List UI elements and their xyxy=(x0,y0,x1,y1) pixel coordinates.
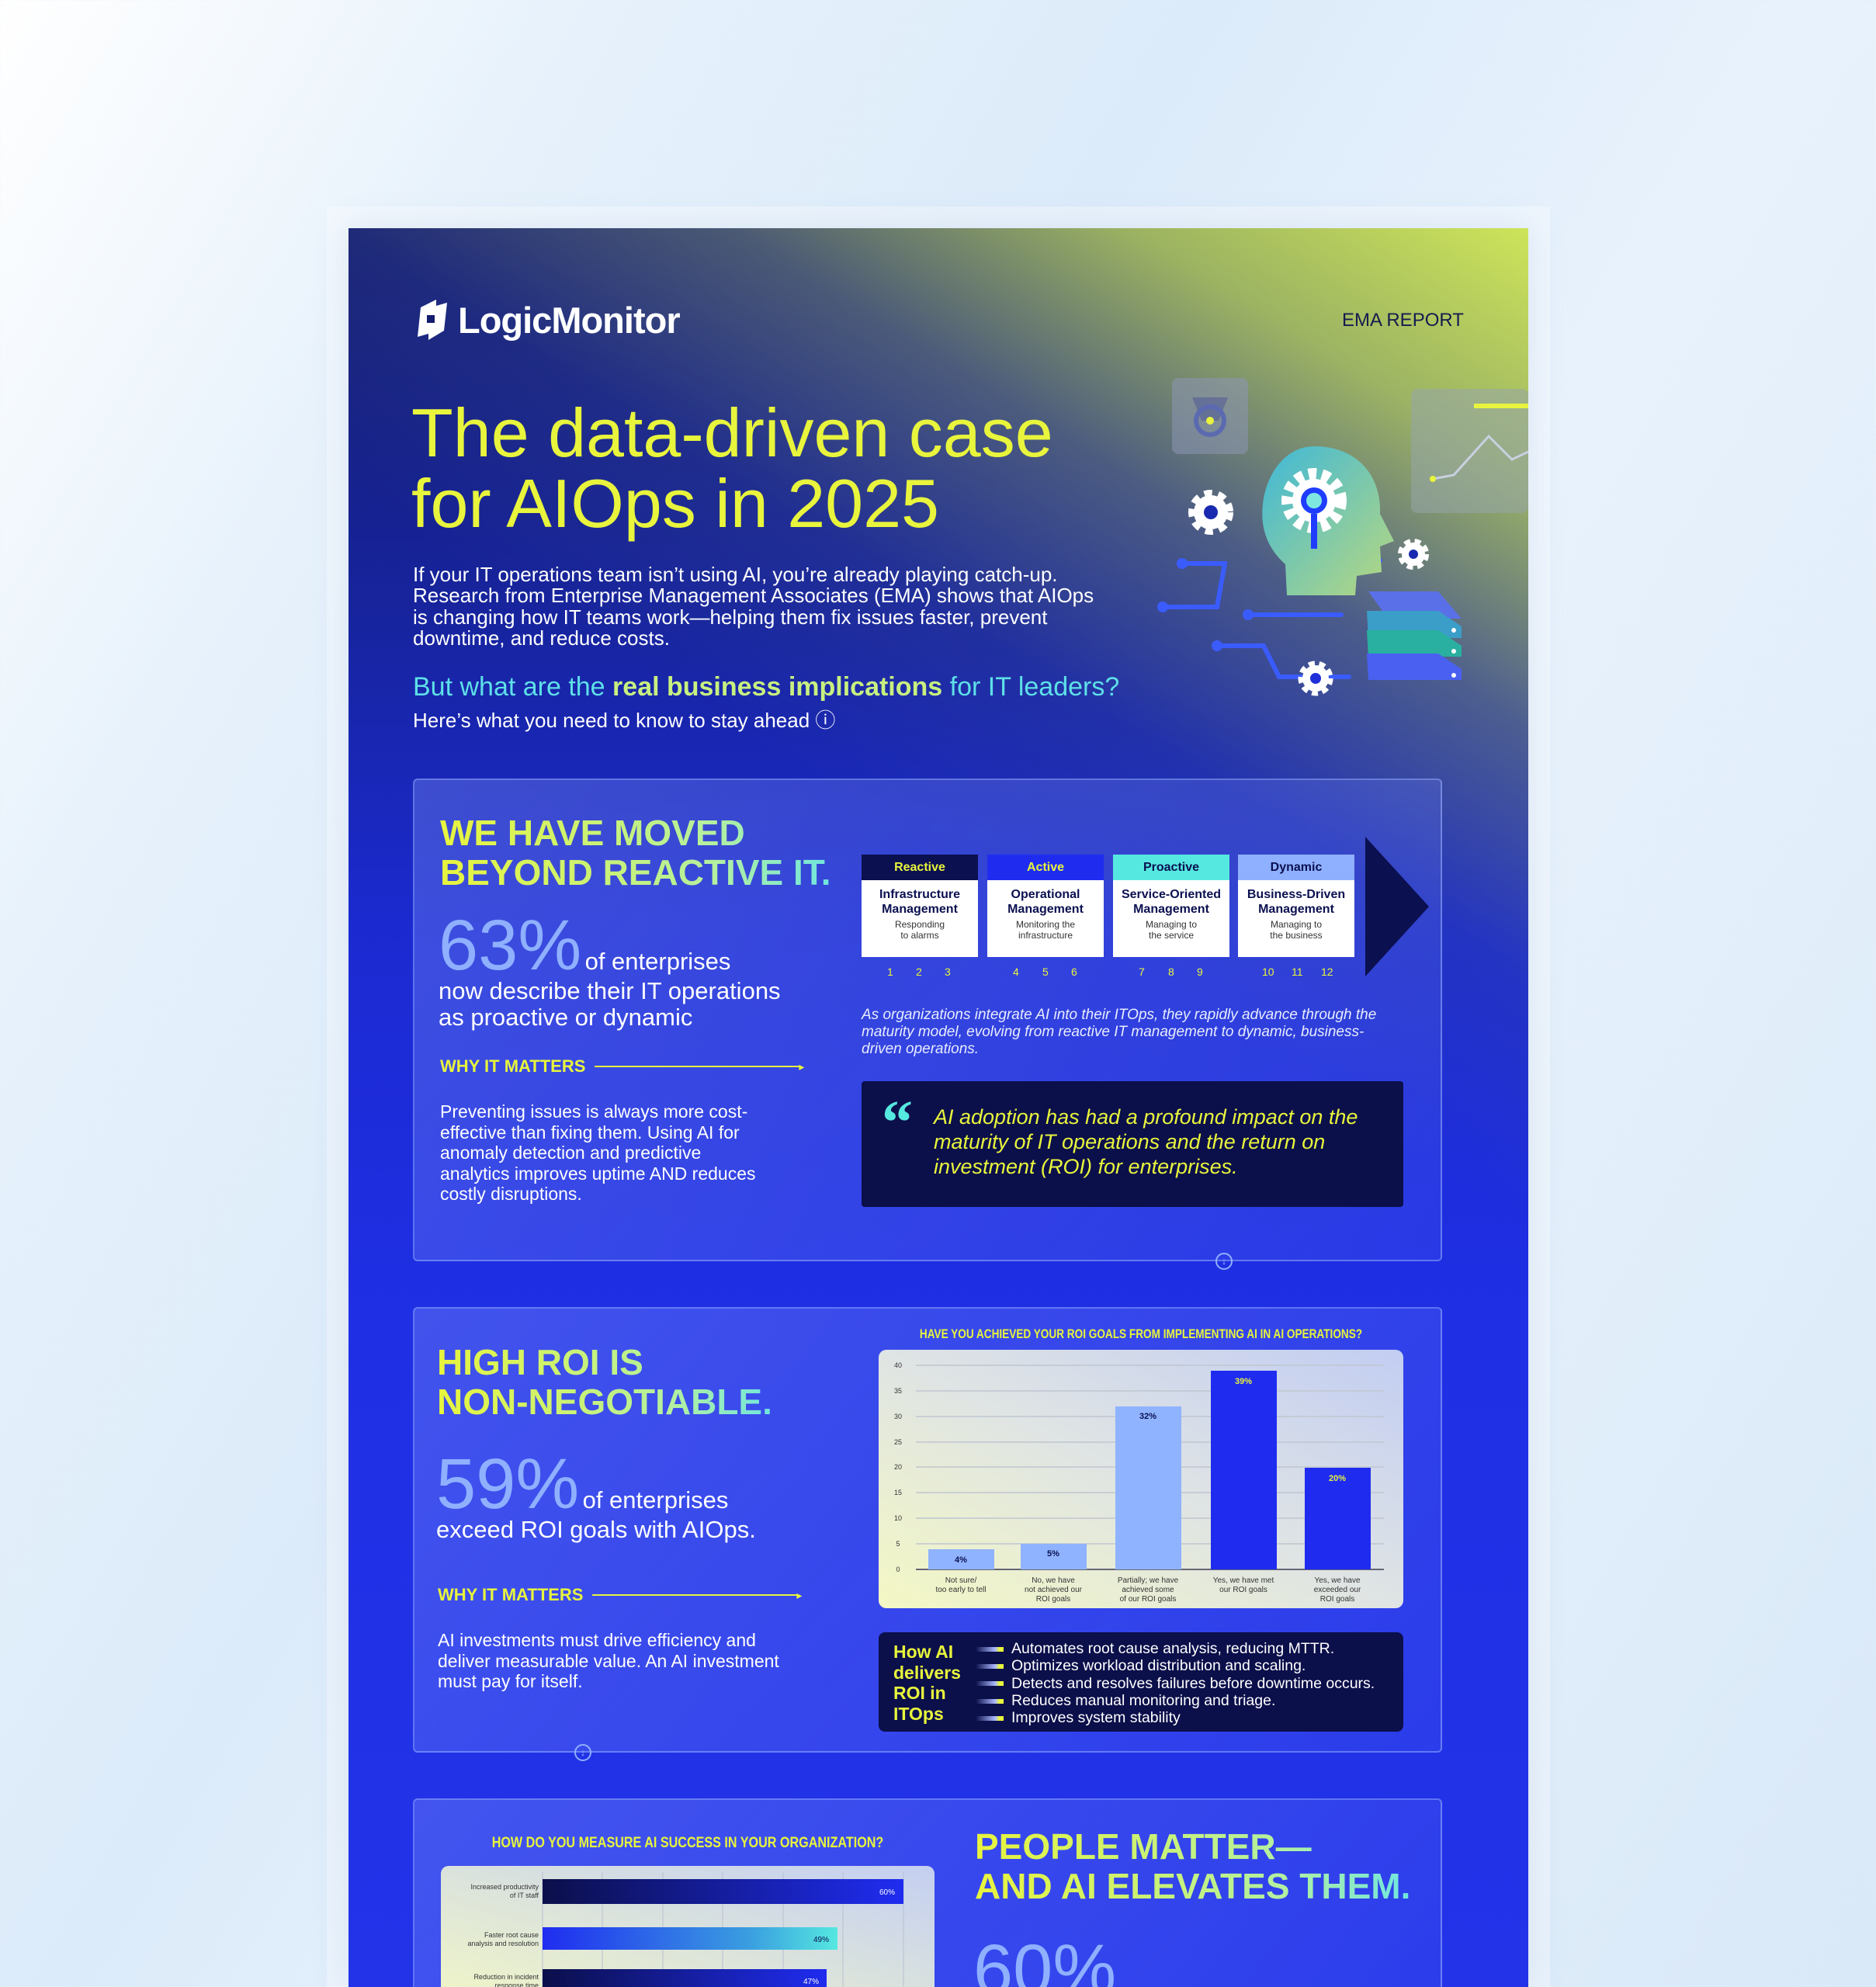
label: why it matters: ▸ xyxy=(796,1588,802,1600)
callout: how AI delivers ROI xyxy=(879,1632,1403,1732)
box: active xyxy=(987,855,1104,957)
heading: we have moved beyond reactive IT xyxy=(440,813,831,893)
maturity levels 1-12: 3 xyxy=(945,966,951,978)
callout: how AI delivers ROI: Improves system stability xyxy=(1011,1709,1181,1726)
box: active: Management xyxy=(1007,903,1084,916)
bar chart: ROI goals: 35 xyxy=(894,1387,902,1395)
intro text: If your IT operations team isn’t using AI, you’re already playing catch-up. Research from Enterprise Management Associates (EMA) shows that AIOps is changing how IT teams work—helping them fix issues faster, prevent downtime, and reduce costs. xyxy=(413,563,1094,650)
heading: high ROI is non-negotiable xyxy=(437,1343,772,1422)
bar chart: AI success measures: Reduction in incident xyxy=(473,1973,539,1981)
bar chart: AI success measures: Increased productivity xyxy=(470,1883,539,1891)
icon: scroll down xyxy=(574,1744,591,1761)
panel: beyond reactive IT xyxy=(413,779,1442,1261)
logo: LogicMonitor xyxy=(458,300,680,340)
box: proactive: Service-Oriented xyxy=(1122,888,1221,901)
callout: how AI delivers ROI: Optimizes workload distribution and scaling. xyxy=(1011,1657,1306,1674)
bar chart: AI success measures: 49% xyxy=(813,1936,829,1944)
maturity levels 1-12: 5 xyxy=(1042,966,1049,978)
panel: high ROI xyxy=(413,1307,1442,1753)
maturity levels 1-12: 12 xyxy=(1321,966,1333,978)
card: infographic page xyxy=(348,228,1528,1987)
bar chart: ROI goals: ROI goals xyxy=(1320,1595,1354,1604)
box: reactive: Infrastructure xyxy=(879,888,960,901)
callout: how AI delivers ROI: How AI xyxy=(893,1642,953,1662)
stat: 59%: 59% of enterprises xyxy=(436,1444,728,1524)
bar chart: ROI goals: 40 xyxy=(894,1361,902,1369)
panel: people matter xyxy=(413,1798,1442,1987)
box: dynamic: Business-Driven xyxy=(1247,888,1345,901)
bar chart: AI success measures xyxy=(441,1866,935,1987)
box: proactive: the service xyxy=(1149,930,1194,941)
bar chart: ROI goals: 20 xyxy=(894,1463,902,1471)
heading: people matter: AND AI ELEVATES THEM. xyxy=(975,1866,1410,1906)
maturity levels 1-12: 6 xyxy=(1071,966,1077,978)
box: reactive: Management xyxy=(882,903,958,916)
box: active: Monitoring the xyxy=(1016,919,1075,930)
bar chart: AI success measures: 47% xyxy=(803,1978,819,1986)
maturity model diagram xyxy=(1365,837,1429,976)
box: proactive xyxy=(1113,855,1229,957)
bar chart: ROI goals: 5% xyxy=(1047,1549,1059,1559)
callout: how AI delivers ROI: ROI in xyxy=(893,1683,946,1703)
bar chart: ROI goals: too early to tell xyxy=(935,1586,987,1594)
box: active: Active xyxy=(1027,861,1064,874)
callout: quote xyxy=(862,1081,1403,1207)
illustration: AI head with gears and servers xyxy=(1157,378,1528,695)
bar chart: ROI goals: 0 xyxy=(896,1566,900,1573)
bar chart: ROI goals xyxy=(879,1350,1403,1608)
label: why it matters: WHY IT MATTERS xyxy=(438,1585,583,1604)
box: active: infrastructure xyxy=(1018,930,1073,941)
callout: how AI delivers ROI: Detects and resolves failures before downtime occurs. xyxy=(1011,1675,1375,1692)
bar chart: ROI goals: 4% xyxy=(955,1555,967,1565)
bar chart: ROI goals: Yes, we have met xyxy=(1213,1576,1274,1585)
heading: we have moved beyond reactive IT: BEYOND REACTIVE IT. xyxy=(440,852,831,893)
icon: scroll down: ↓ xyxy=(581,1746,585,1758)
bar chart: ROI goals: 30 xyxy=(894,1413,902,1420)
callout: quote: “ xyxy=(882,1089,913,1157)
chart title: measuring AI success: HOW DO YOU MEASURE AI SUCCESS IN YOUR ORGANIZATION? xyxy=(492,1835,883,1851)
label: why it matters xyxy=(440,1056,804,1076)
heading: high ROI is non-negotiable: HIGH ROI IS xyxy=(437,1342,643,1382)
title: The data-driven case xyxy=(411,394,1053,471)
box: dynamic: the business xyxy=(1270,930,1323,941)
stat: 63%: as proactive or dynamic xyxy=(439,1004,692,1031)
box: reactive: Responding xyxy=(895,919,945,930)
bar chart: ROI goals: Partially; we have xyxy=(1118,1576,1179,1585)
stat: 63%: now describe their IT operations xyxy=(439,977,781,1004)
stat: 63% xyxy=(439,906,781,1031)
callout: how AI delivers ROI: ITOps xyxy=(893,1703,944,1723)
callout: quote: AI adoption has had a profound impact on the maturity of IT operations and the return on investment (ROI) for enterprises. xyxy=(934,1105,1358,1178)
bar chart: ROI goals: not achieved our xyxy=(1025,1586,1083,1594)
bar chart: AI success measures: of IT staff xyxy=(510,1892,539,1899)
bar chart: ROI goals: 32% xyxy=(1139,1412,1156,1421)
maturity levels 1-12: 8 xyxy=(1168,966,1174,978)
maturity levels 1-12: 4 xyxy=(1013,966,1019,978)
icon: scroll down xyxy=(1215,1253,1233,1270)
box: proactive: Proactive xyxy=(1143,861,1199,874)
bar chart: ROI goals: 20% xyxy=(1329,1474,1346,1483)
label: EMA report: EMA REPORT xyxy=(1342,310,1464,331)
box: proactive: Management xyxy=(1133,903,1209,916)
subheading: But what are the real business implications for IT leaders? xyxy=(413,672,1119,702)
bar chart: AI success measures: 60% xyxy=(879,1888,895,1897)
maturity levels 1-12: 1 xyxy=(887,966,893,978)
maturity levels 1-12: 7 xyxy=(1139,966,1145,978)
bar chart: ROI goals: our ROI goals xyxy=(1219,1586,1267,1594)
box: reactive: to alarms xyxy=(900,930,939,941)
bar chart: ROI goals: 25 xyxy=(894,1438,902,1446)
box: dynamic: Management xyxy=(1258,903,1334,916)
callout: how AI delivers ROI: delivers xyxy=(893,1663,961,1683)
box: proactive: Managing to xyxy=(1146,919,1197,930)
maturity levels 1-12: 10 xyxy=(1262,966,1274,978)
title xyxy=(411,394,1053,542)
text block: why it matters: Preventing issues is always more cost-effective than fixing them. Using AI for anomaly detection and predictive analytics improves uptime AND reduces costly disruptions. xyxy=(440,1101,756,1204)
box: active: Operational xyxy=(1011,888,1080,901)
box: dynamic xyxy=(1238,855,1354,957)
lead-in text: Here’s what you need to know to stay ahead ⓘ xyxy=(413,709,835,732)
bar chart: ROI goals: achieved some xyxy=(1122,1586,1174,1594)
chart title: ROI goals: HAVE YOU ACHIEVED YOUR ROI GOALS FROM IMPLEMENTING AI IN AI OPERATIONS? xyxy=(920,1326,1362,1341)
bar chart: ROI goals: No, we have xyxy=(1032,1576,1075,1585)
stat: 63%: 63% of enterprises xyxy=(439,906,730,985)
bar chart: AI success measures: analysis and resolution xyxy=(467,1940,539,1947)
heading: high ROI is non-negotiable: NON-NEGOTIABLE. xyxy=(437,1382,772,1422)
maturity levels 1-12: 2 xyxy=(916,966,922,978)
bar chart: ROI goals: of our ROI goals xyxy=(1120,1595,1176,1604)
arrow: maturity progression xyxy=(1365,837,1429,976)
heading: people matter xyxy=(975,1827,1410,1906)
bar chart: ROI goals: Not sure/ xyxy=(945,1576,977,1585)
heading: we have moved beyond reactive IT: WE HAVE MOVED xyxy=(440,813,745,853)
text block: ROI why it matters: AI investments must drive efficiency and deliver measurable value. An AI investment must pay for itself. xyxy=(438,1630,779,1691)
label: why it matters: WHY IT MATTERS xyxy=(440,1056,585,1076)
bar chart: ROI goals: exceeded our xyxy=(1314,1586,1361,1594)
caption: maturity model: As organizations integrate AI into their ITOps, they rapidly advance through the maturity model, evolving from reactive IT management to dynamic, business-driven operations. xyxy=(862,1007,1376,1057)
box: dynamic: Dynamic xyxy=(1271,861,1322,874)
label: why it matters: ▸ xyxy=(799,1060,804,1073)
box: reactive xyxy=(862,855,978,957)
callout: how AI delivers ROI: Reduces manual monitoring and triage. xyxy=(1011,1692,1275,1709)
bar chart: ROI goals: 39% xyxy=(1235,1377,1252,1386)
maturity levels 1-12 xyxy=(887,966,1333,978)
bar chart: ROI goals: 10 xyxy=(894,1514,902,1522)
stat: 59%: exceed ROI goals with AIOps. xyxy=(436,1516,756,1543)
bar chart: ROI goals: 5 xyxy=(896,1540,900,1548)
box: reactive: Reactive xyxy=(894,861,945,874)
label: why it matters xyxy=(438,1585,803,1604)
box: dynamic: Managing to xyxy=(1271,919,1322,930)
maturity levels 1-12: 9 xyxy=(1197,966,1203,978)
heading: people matter: PEOPLE MATTER— xyxy=(975,1826,1312,1867)
bar chart: ROI goals: Yes, we have xyxy=(1314,1576,1361,1585)
icon: scroll down: ↓ xyxy=(1222,1255,1226,1267)
callout: how AI delivers ROI: Automates root cause analysis, reducing MTTR. xyxy=(1011,1640,1334,1657)
bar chart: AI success measures: Faster root cause xyxy=(484,1931,539,1939)
bar chart: ROI goals: ROI goals xyxy=(1036,1595,1070,1604)
title: for AIOps in 2025 xyxy=(411,465,939,542)
maturity levels 1-12: 11 xyxy=(1292,966,1303,978)
bar chart: ROI goals: 15 xyxy=(894,1489,902,1496)
